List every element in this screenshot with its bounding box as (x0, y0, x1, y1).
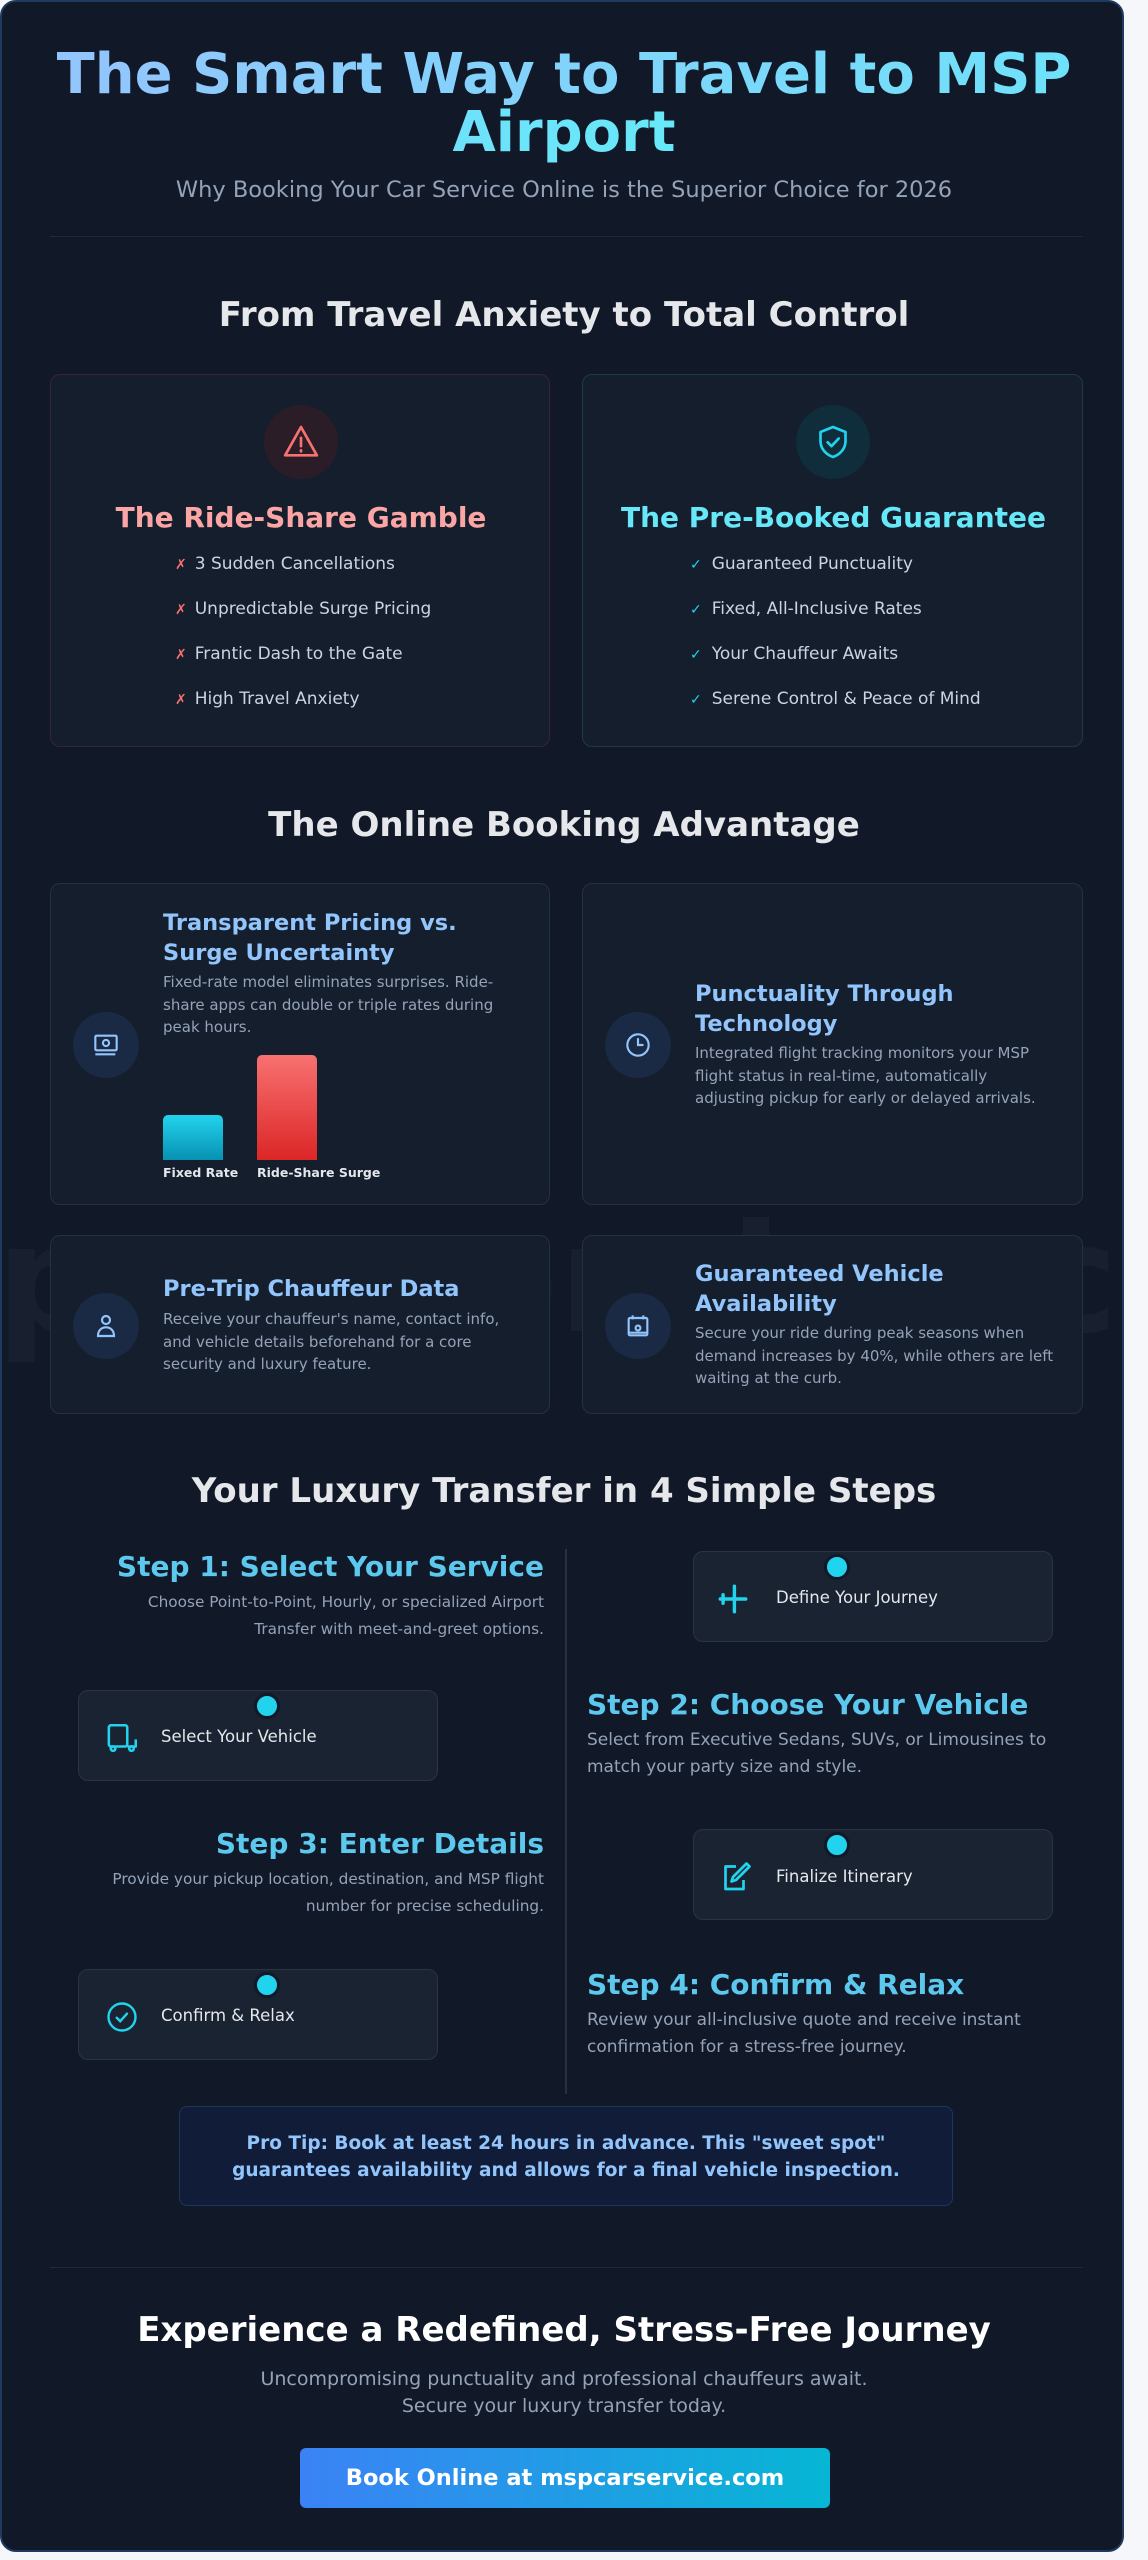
step box: select your vehicle: Select Your Vehicle (161, 1727, 317, 1746)
text (695, 981, 1036, 1107)
text: Pre-Trip Chauffeur Data (163, 1276, 459, 1302)
list: positives (690, 554, 981, 709)
text: waiting at the curb. (695, 1369, 842, 1387)
callout: pro tip: Pro Tip: Book at least 24 hours in advance. This "sweet spot" (247, 2133, 885, 2154)
list: positives: ✓ Serene Control & Peace of Mind (690, 689, 981, 709)
step 2 (587, 1688, 1046, 1777)
icon: person (73, 1293, 139, 1359)
step box: define your journey (693, 1551, 1053, 1642)
step 3: number for precise scheduling. (306, 1897, 544, 1915)
text: and vehicle details beforehand for a core (163, 1333, 472, 1351)
text: Guaranteed Vehicle (695, 1261, 944, 1287)
step 4 (587, 1968, 1021, 2057)
title: Airport (452, 100, 676, 165)
closing text: Secure your luxury transfer today. (402, 2395, 726, 2417)
heading: The Online Booking Advantage: The Online Booking Advantage (268, 805, 860, 845)
text: peak hours. (163, 1018, 251, 1036)
step box: confirm & relax: Confirm & Relax (161, 2006, 295, 2025)
card title: The Ride-Share Gamble (116, 501, 486, 534)
card title: The Pre-Booked Guarantee (621, 501, 1046, 534)
text (163, 910, 493, 1036)
list: positives: ✓ Guaranteed Punctuality (690, 554, 913, 574)
step box: select your vehicle (78, 1690, 438, 1781)
text (695, 1261, 1053, 1387)
list: negatives: ✗ 3 Sudden Cancellations (175, 554, 395, 574)
text (163, 1276, 499, 1373)
bar chart: Ride-Share Surge (257, 1165, 380, 1180)
heading: From Travel Anxiety to Total Control: From Travel Anxiety to Total Control (219, 295, 909, 335)
subtitle: Why Booking Your Car Service Online is the Superior Choice for 2026 (176, 177, 952, 203)
list: positives: ✓ Your Chauffeur Awaits (690, 644, 898, 664)
button: book online (300, 2448, 830, 2508)
panel: punctuality (582, 883, 1083, 1205)
text: share apps can double or triple rates during (163, 996, 493, 1014)
icon: money (73, 1012, 139, 1078)
step box: finalize itinerary (693, 1829, 1053, 1920)
step 3: Step 3: Enter Details (216, 1827, 544, 1860)
text: Secure your ride during peak seasons when (695, 1324, 1024, 1342)
list: negatives: ✗ Frantic Dash to the Gate (175, 644, 403, 664)
step 4: Step 4: Confirm & Relax (587, 1968, 964, 2001)
step box: confirm & relax (78, 1969, 438, 2060)
bar chart: Fixed Rate (163, 1165, 238, 1180)
text: flight status in real-time, automatically (695, 1067, 987, 1085)
step 4: Review your all-inclusive quote and receive instant (587, 2010, 1021, 2030)
step 2: Step 2: Choose Your Vehicle (587, 1688, 1028, 1721)
text: adjusting pickup for early or delayed arrivals. (695, 1089, 1036, 1107)
icon: check circle (107, 2002, 137, 2032)
step 3 (112, 1827, 544, 1915)
title (57, 42, 1071, 165)
step 3: Provide your pickup location, destination, and MSP flight (112, 1870, 544, 1888)
step 1 (117, 1550, 544, 1638)
text: Transparent Pricing vs. (163, 910, 457, 936)
closing text (260, 2368, 868, 2417)
panel: transparent pricing (50, 883, 550, 1205)
icon: clock (605, 1012, 671, 1078)
step 1: Choose Point-to-Point, Hourly, or specialized Airport (148, 1593, 544, 1611)
text: Availability (695, 1291, 837, 1317)
heading: 4 simple steps: Your Luxury Transfer in 4 Simple Steps (192, 1471, 936, 1511)
icon: shield (796, 405, 870, 479)
step box: define your journey: Define Your Journey (776, 1588, 938, 1607)
text: security and luxury feature. (163, 1355, 371, 1373)
button: book online: Book Online at mspcarservice.com (346, 2465, 784, 2491)
callout: pro tip: guarantees availability and allows for a final vehicle inspection. (232, 2160, 900, 2181)
closing heading: Experience a Redefined, Stress-Free Journey (137, 2310, 991, 2350)
step 4: confirmation for a stress-free journey. (587, 2037, 907, 2057)
callout: pro tip (179, 2106, 953, 2206)
icon: pencil (724, 1862, 751, 1890)
text: Punctuality Through (695, 981, 954, 1007)
closing text: Uncompromising punctuality and professional chauffeurs await. (260, 2368, 868, 2390)
step 1: Step 1: Select Your Service (117, 1550, 544, 1583)
panel: pre-booked guarantee (582, 374, 1083, 747)
timeline line (565, 1549, 567, 2094)
icon: vehicle (108, 1724, 138, 1752)
text: Receive your chauffeur's name, contact info, (163, 1310, 499, 1328)
step 2: match your party size and style. (587, 1757, 862, 1777)
list: negatives (175, 554, 431, 709)
step 2: Select from Executive Sedans, SUVs, or Limousines to (587, 1730, 1046, 1750)
title: The Smart Way to Travel to MSP (57, 42, 1071, 107)
list: negatives: ✗ High Travel Anxiety (175, 689, 360, 709)
text: Surge Uncertainty (163, 940, 395, 966)
icon: calendar (605, 1293, 671, 1359)
icon: warning (264, 405, 338, 479)
panel: vehicle availability (582, 1235, 1083, 1414)
text: Technology (695, 1011, 837, 1037)
panel: ride-share gamble (50, 374, 550, 747)
text: Integrated flight tracking monitors your MSP (695, 1044, 1029, 1062)
panel: chauffeur data (50, 1235, 550, 1414)
step 1: Transfer with meet-and-greet options. (254, 1620, 544, 1638)
list: positives: ✓ Fixed, All-Inclusive Rates (690, 599, 922, 619)
icon: plane (718, 1584, 748, 1614)
bar chart (163, 1055, 380, 1180)
step box: finalize itinerary: Finalize Itinerary (776, 1867, 913, 1886)
text: Fixed-rate model eliminates surprises. Ride- (163, 973, 493, 991)
text: demand increases by 40%, while others are left (695, 1347, 1053, 1365)
list: negatives: ✗ Unpredictable Surge Pricing (175, 599, 431, 619)
